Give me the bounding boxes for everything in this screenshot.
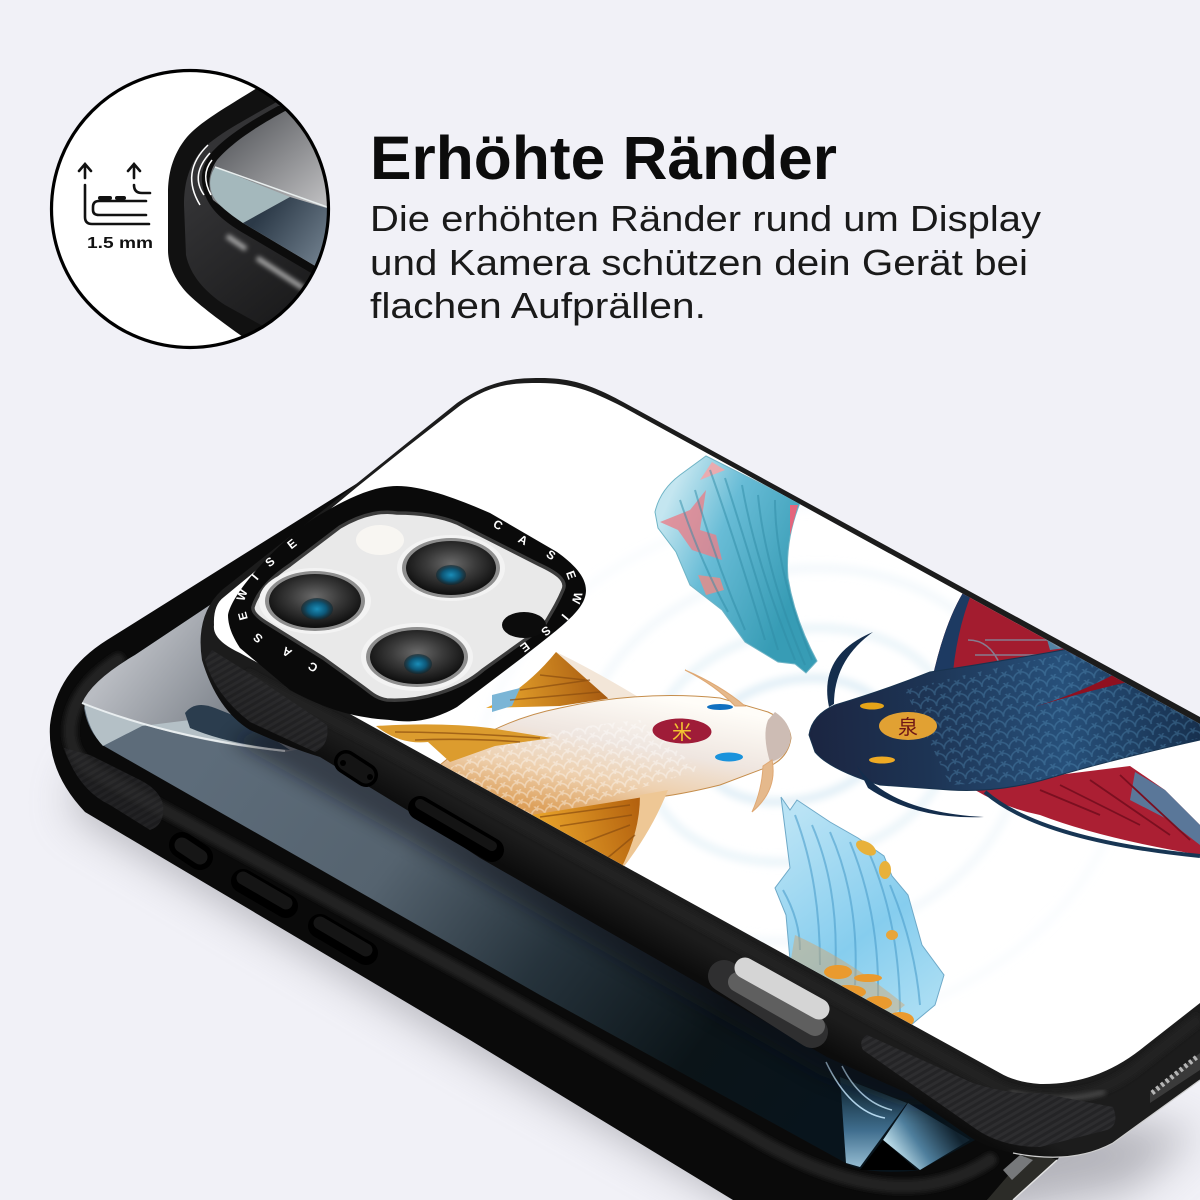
lower pale blue fin: [775, 797, 944, 1030]
water ripples: [605, 568, 1008, 945]
koi body: [376, 670, 791, 874]
lens bottom: [361, 623, 473, 691]
upper phone: back of case: [180, 370, 1200, 1157]
carbon tile: [64, 748, 163, 830]
koi lower fin: [532, 798, 640, 866]
circle background: [51, 70, 329, 348]
description text: [370, 198, 1041, 326]
bottom glass reflection right: [883, 1103, 970, 1170]
camera ring logo text: I: [249, 571, 261, 583]
camera ring logo text: [233, 517, 585, 675]
blue fish body: [809, 632, 1200, 817]
lower frame inner ridge: [70, 660, 990, 1186]
light edge of lower phone: [1013, 1160, 1057, 1200]
camera ring logo text: E: [563, 569, 579, 581]
phone corner close-up: [168, 88, 340, 337]
camera ring logo text: C: [491, 517, 505, 533]
carbon tile near corner: [861, 1035, 1115, 1147]
icon label: 1.5 mm: [87, 235, 153, 252]
koi side fin rays: [395, 732, 540, 742]
blue fish fins: [932, 588, 1200, 856]
blue fish gold mark: [879, 712, 937, 740]
pale glass wedge: [84, 703, 285, 752]
shadow of upper phone on screen: [230, 650, 1100, 1105]
description text: flachen Aufprällen.: [370, 285, 706, 326]
camera ring logo text: A: [279, 644, 294, 660]
screen glass: [84, 545, 1060, 1172]
corner highlight: [1010, 1092, 1105, 1099]
volume up button: [243, 878, 286, 906]
case bottom light edge: [1013, 1080, 1200, 1157]
koi red mark: 米: [672, 721, 692, 744]
frame ridge: [245, 675, 1200, 1097]
koi fins behind body: [486, 652, 640, 712]
curved reflection lines: [826, 1062, 892, 1118]
koi whiskers: [685, 670, 773, 812]
side button: [420, 804, 492, 850]
koi fin rays: [540, 805, 635, 860]
camera ring logo text: C: [305, 659, 320, 675]
lower metal side sliver: [987, 1150, 1057, 1200]
lower phone frame: [50, 474, 1110, 1200]
dark notch reflection: [185, 705, 290, 750]
icon: raised edge diagram: [79, 164, 150, 224]
metal port on the lower phone: [1003, 1155, 1033, 1180]
white back panel: [214, 383, 1200, 1084]
camera ring logo text: S: [262, 554, 278, 570]
microphone hole: [502, 612, 546, 638]
lower phone: front side with screen: [50, 474, 1110, 1200]
blue fish gold mark: 泉: [898, 716, 918, 739]
camera ring logo text: W: [233, 587, 251, 603]
circle outline: [52, 70, 328, 348]
camera ring logo text: W: [569, 591, 585, 606]
camera ring outer: [228, 486, 586, 721]
camera ring logo text: E: [235, 610, 251, 622]
blue fish eyes: [860, 702, 884, 710]
camera ring logo text: E: [518, 639, 532, 655]
camera ring logo text: S: [250, 630, 266, 646]
silent switch: [340, 760, 373, 780]
koi eyes: [707, 704, 733, 710]
koi lower fin base: [622, 790, 668, 866]
impact arcs: [192, 145, 212, 205]
speaker patch: [1150, 1053, 1200, 1103]
blue fish whiskers: [827, 632, 984, 817]
upper teal fin: [655, 456, 817, 673]
koi side fin: [376, 724, 552, 762]
back panel with artwork: [214, 383, 1200, 1084]
speaker holes: [1152, 1056, 1198, 1093]
screen top gray reflection: [82, 545, 320, 752]
title: Erhöhte Ränder: [370, 124, 837, 192]
camera ring logo text: I: [559, 611, 571, 623]
camera island: [228, 486, 586, 721]
flash: [356, 525, 404, 555]
black notch: [860, 1140, 917, 1170]
description text: Die erhöhten Ränder rund um Display: [370, 198, 1041, 239]
lens top right: [397, 535, 505, 601]
description text: und Kamera schützen dein Gerät bei: [370, 242, 1028, 283]
white glare line: [82, 703, 285, 751]
phone shadow: [70, 760, 1200, 1200]
camera plate: [253, 512, 564, 700]
case frame: [201, 378, 1200, 1157]
camera ring logo text: A: [516, 532, 530, 548]
lens left: [259, 568, 371, 634]
koi red mark: [652, 717, 712, 745]
carbon camera bump side: [205, 650, 328, 752]
charging port: [724, 968, 819, 1032]
detail circle: [51, 70, 340, 348]
camera ring logo text: S: [544, 547, 558, 563]
camera ring logo text: E: [285, 536, 299, 552]
bottom glass reflection left: [840, 1077, 907, 1167]
volume down button: [320, 923, 366, 953]
action button: [182, 845, 200, 857]
camera ring logo text: S: [539, 623, 553, 639]
